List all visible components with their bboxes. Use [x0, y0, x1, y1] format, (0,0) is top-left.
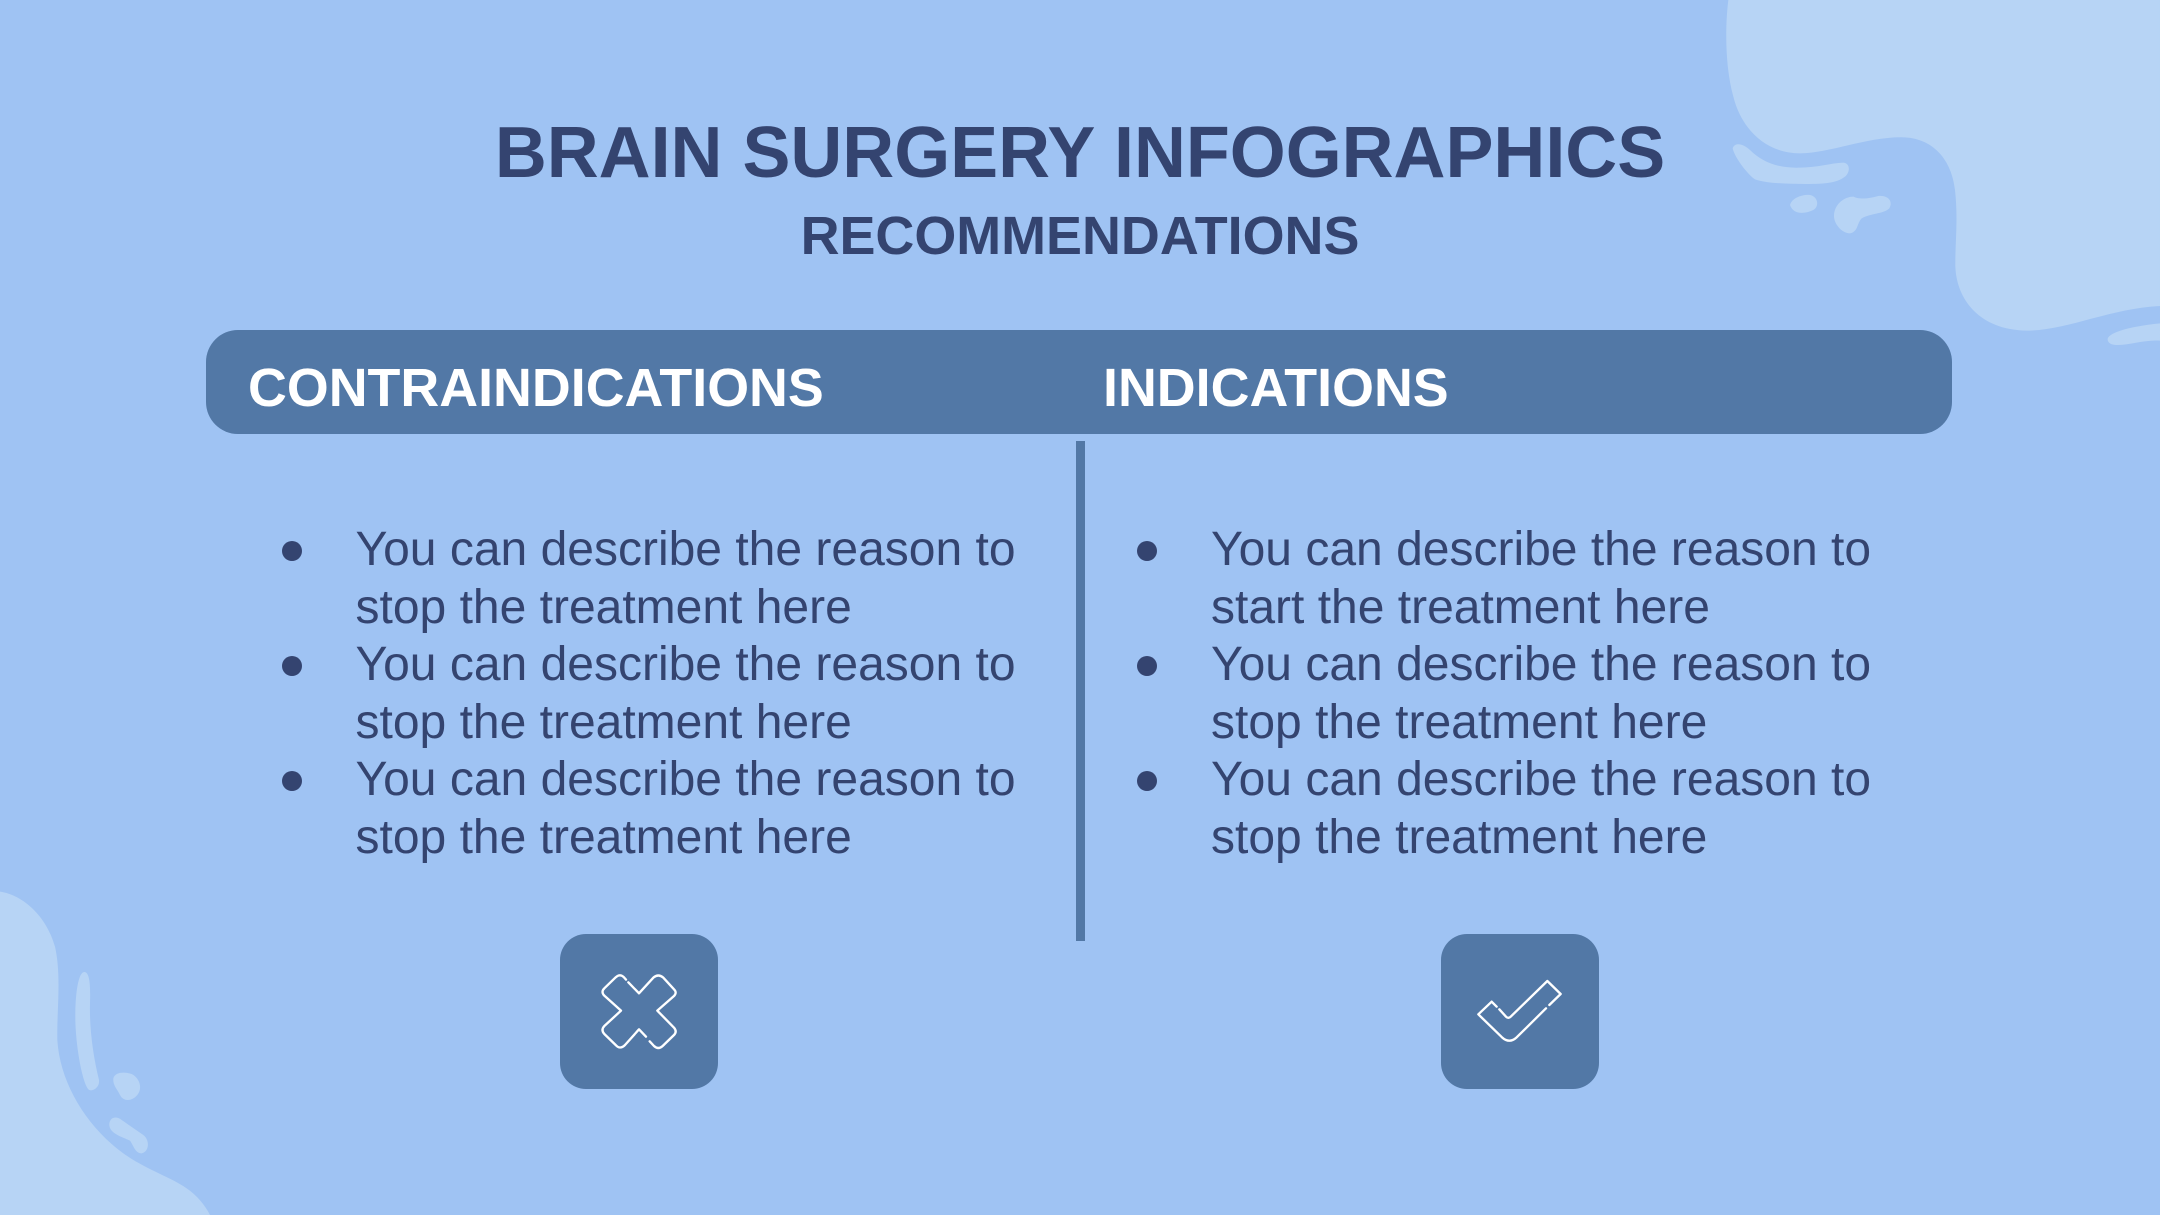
- heading: contraindications: CONTRAINDICATIONS: [248, 358, 824, 418]
- icon: check box: [1441, 934, 1599, 1089]
- text block: indications list: You can describe the reason to: [1211, 523, 1871, 576]
- text block: contraindications list: [282, 523, 1016, 864]
- title: BRAIN SURGERY INFOGRAPHICS: [495, 113, 1665, 193]
- text block: contraindications list: You can describe the reason to: [356, 638, 1016, 691]
- text block: contraindications list: stop the treatment here: [356, 811, 852, 864]
- text block: contraindications list: You can describe the reason to: [356, 523, 1016, 576]
- text block: indications list: [1137, 523, 1871, 864]
- text block: indications list: You can describe the reason to: [1211, 638, 1871, 691]
- text block: contraindications list: stop the treatment here: [356, 581, 852, 634]
- blob: top right: [1726, 0, 2160, 345]
- subtitle: RECOMMENDATIONS: [801, 206, 1359, 266]
- text block: indications list: start the treatment here: [1211, 581, 1710, 634]
- text block: indications list: stop the treatment here: [1211, 811, 1707, 864]
- text block: contraindications list: stop the treatment here: [356, 696, 852, 749]
- heading: indications: INDICATIONS: [1103, 358, 1449, 418]
- center divider: [1076, 441, 1085, 941]
- blob: bottom left: [0, 892, 210, 1215]
- icon: check glyph: [1478, 981, 1561, 1041]
- text block: indications list: stop the treatment here: [1211, 696, 1707, 749]
- text block: contraindications list: You can describe the reason to: [356, 753, 1016, 806]
- icon: cross box: [560, 934, 718, 1089]
- header bar: [206, 330, 1952, 434]
- icon: cross glyph: [602, 975, 676, 1048]
- text block: indications list: You can describe the reason to: [1211, 753, 1871, 806]
